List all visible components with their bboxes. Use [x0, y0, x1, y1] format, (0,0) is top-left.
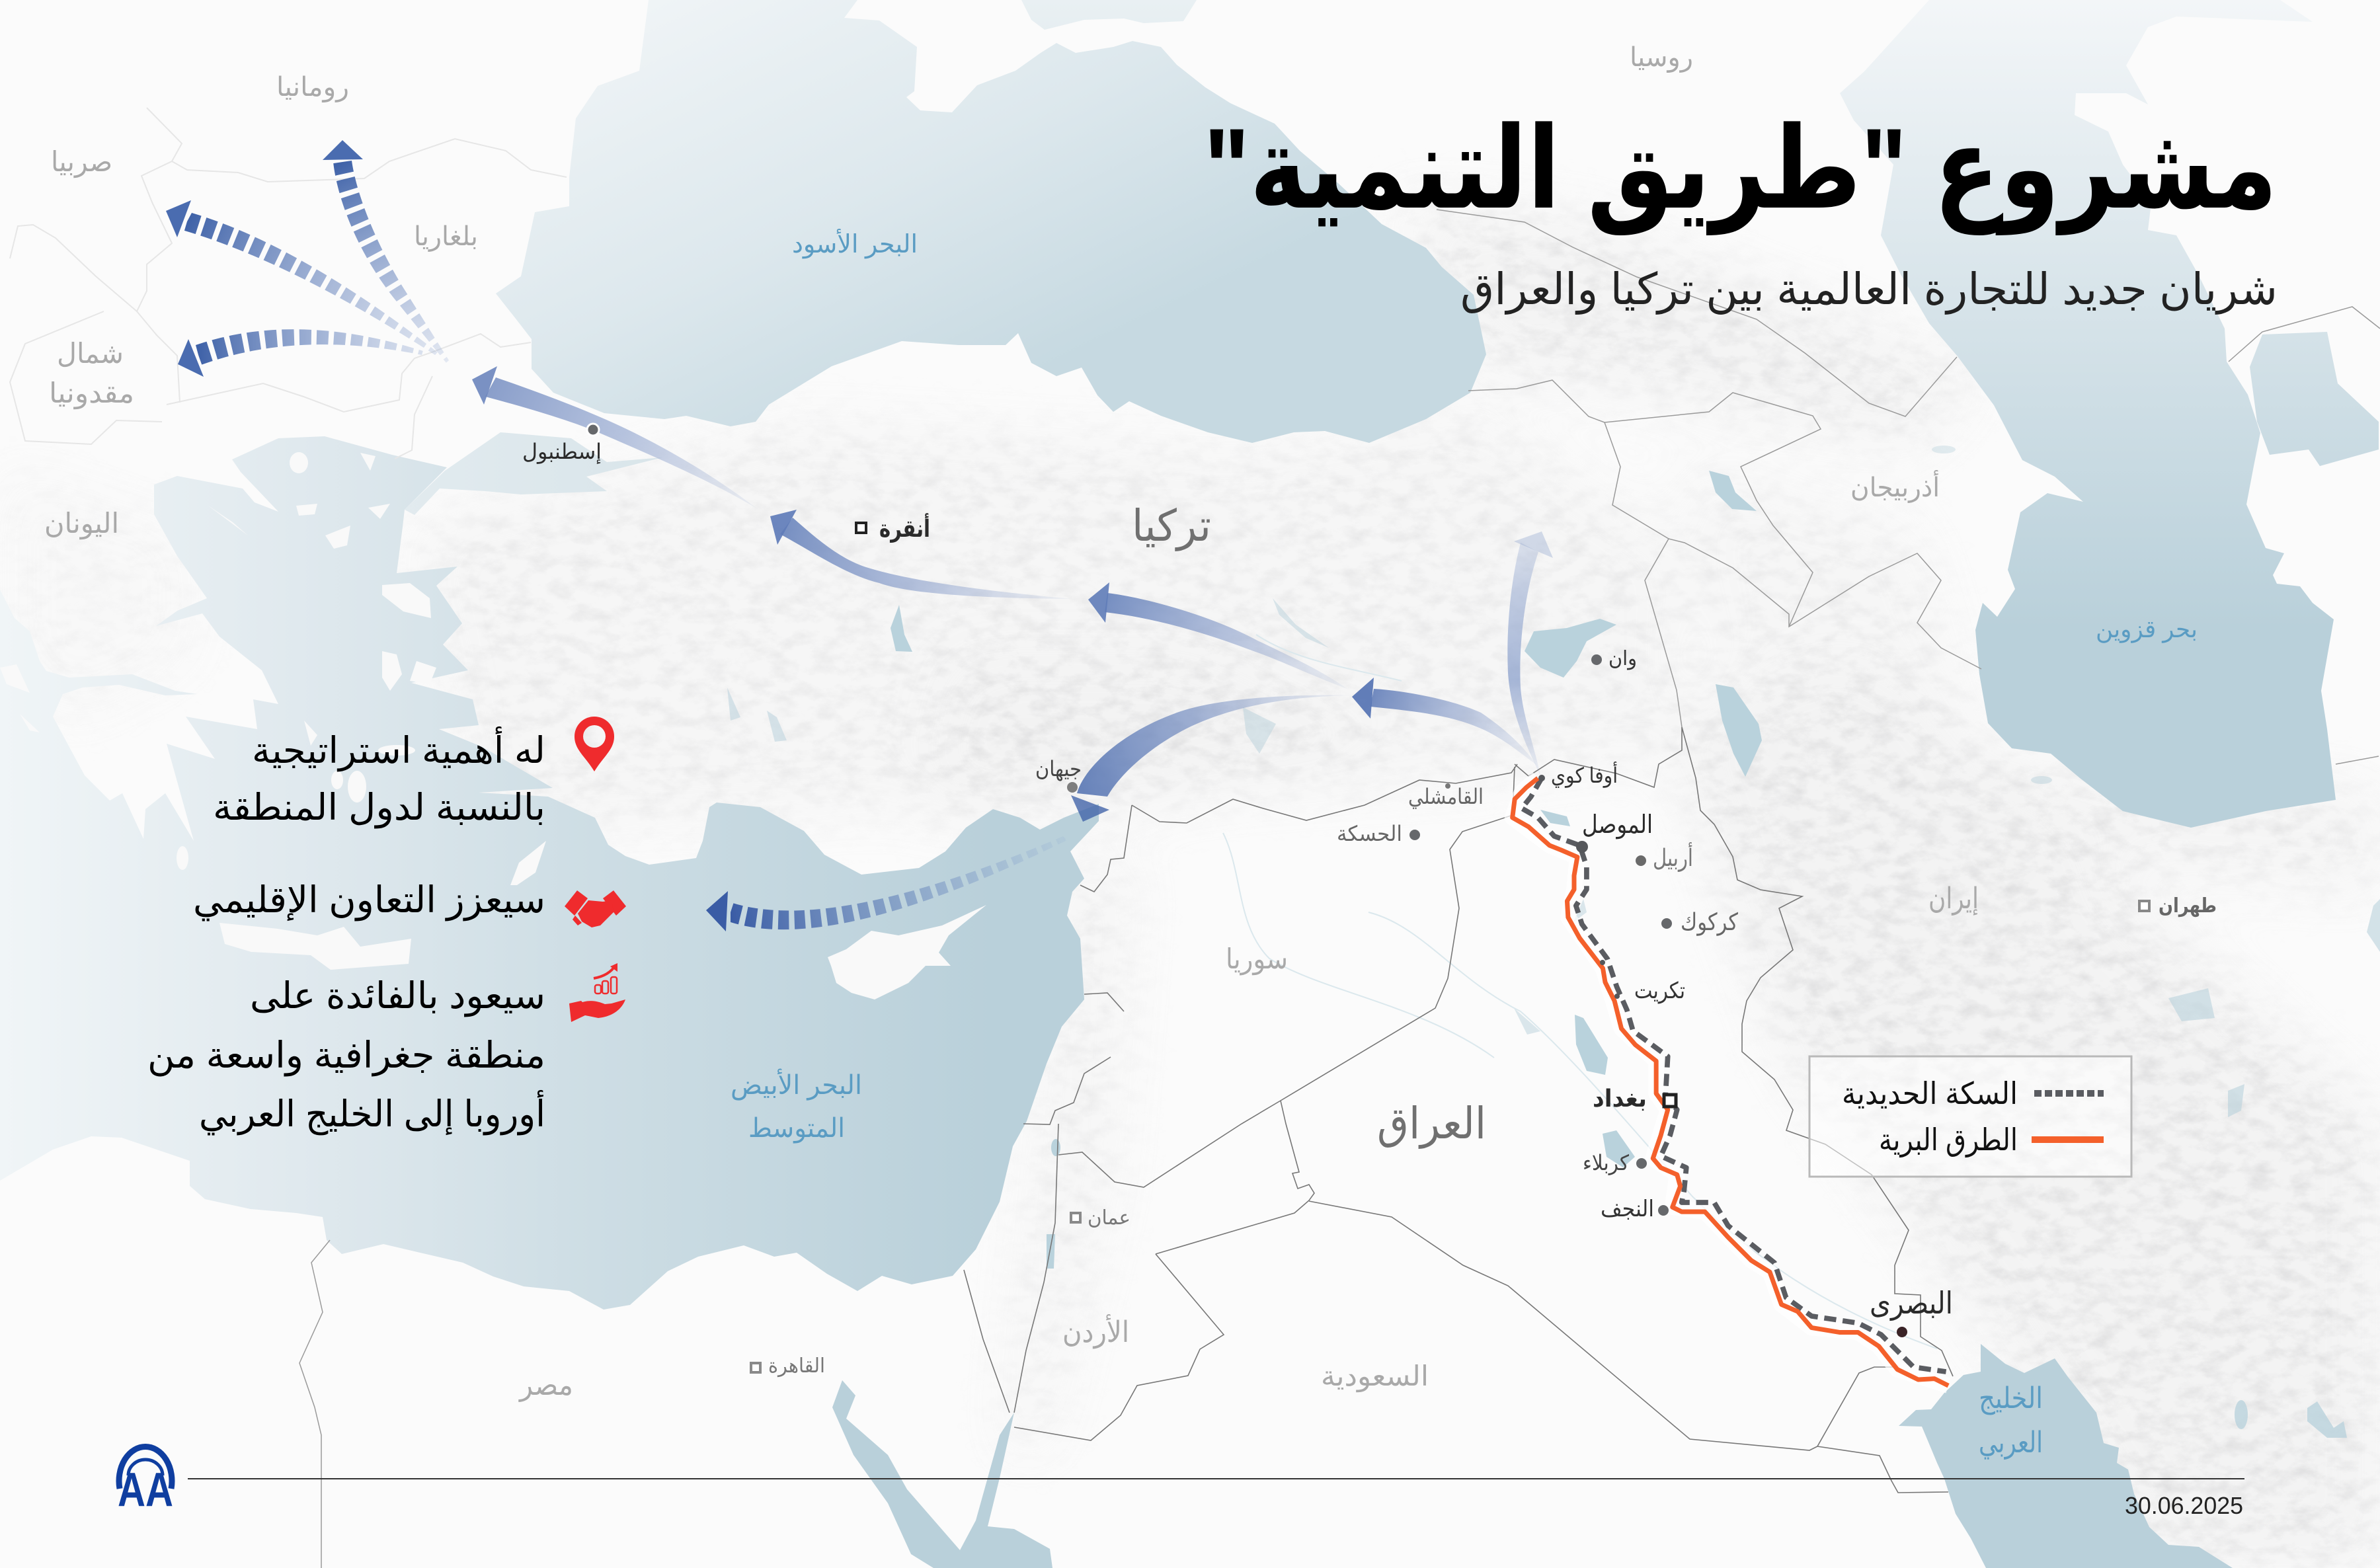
subtitle: شريان جديد للتجارة العالمية بين تركيا والعراق [1460, 264, 2278, 315]
arrow: dashed to Serbia [166, 200, 438, 355]
label: Cairo: القاهرة [768, 1355, 825, 1377]
arrow: solid to Ceyhan [1071, 695, 1352, 822]
label: Mediterranean line 2: المتوسط [748, 1114, 845, 1144]
icon: location pin [575, 717, 614, 771]
label: Gulf line 1: الخليج [1979, 1382, 2043, 1415]
label: Russia: روسيا [1630, 43, 1693, 73]
label: Erbil: أربيل [1653, 842, 1693, 872]
label: Kirkuk: كركوك [1681, 908, 1739, 936]
road line [1513, 778, 1948, 1386]
arrow: solid toward Ankara [770, 510, 1072, 599]
country borders [964, 727, 1953, 1493]
label: North: شمال [57, 338, 124, 369]
sea: Azov [1021, 0, 1197, 30]
label: Bulgaria: بلغاريا [414, 222, 478, 252]
rivers [1223, 635, 1937, 1349]
label: Ankara: أنقرة [879, 513, 930, 543]
text: point 3 line 3: أوروبا إلى الخليج العربي [199, 1090, 545, 1136]
date: 30.06.2025 [2125, 1492, 2243, 1519]
label: Serbia: صربيا [51, 146, 112, 178]
label: Ovakoy: أوفا كوي [1551, 762, 1618, 788]
text: point 2: سيعزز التعاون الإقليمي [193, 879, 545, 921]
label: Saudi Arabia: السعودية [1321, 1360, 1429, 1392]
text: point 3 line 1: سيعود بالفائدة على [250, 975, 545, 1017]
label: Macedonia: مقدونيا [49, 377, 134, 409]
text: point 3 line 2: منطقة جغرافية واسعة من [147, 1035, 545, 1077]
legend: road sample [2032, 1136, 2104, 1143]
label: Najaf: النجف [1601, 1196, 1654, 1222]
city labels [522, 440, 2217, 1377]
arrow: dashed to Romania [323, 140, 449, 363]
arrow: dashed to North Macedonia [178, 329, 423, 377]
label: Tikrit: تكريت [1634, 978, 1685, 1004]
label: Van: وان [1608, 648, 1637, 670]
logo: AA: AA [118, 1464, 173, 1516]
key points panel [147, 717, 626, 1136]
railway line [1522, 778, 1946, 1372]
terrain relief texture [464, 225, 2377, 1562]
arrow: solid north [1507, 531, 1553, 777]
label: Ceyhan: جيهان [1035, 757, 1082, 781]
arrow: solid toward Istanbul [472, 366, 758, 509]
label: Karbala: كربلاء [1583, 1151, 1630, 1175]
label: Tehran: طهران [2159, 895, 2217, 917]
label: Hasakah: الحسكة [1337, 822, 1402, 845]
label: Azerbaijan: أذربيجان [1850, 470, 1940, 503]
label: Greece: اليونان [44, 508, 119, 539]
sea: Marmara [405, 432, 662, 515]
label: Romania: رومانيا [276, 73, 349, 102]
sea: Arabian Gulf [1899, 1344, 2233, 1568]
sea: Kara-Bogaz [2250, 332, 2379, 466]
sea: Black Sea [496, 0, 1486, 443]
terrain tint [1002, 713, 2038, 883]
label: Baghdad: بغداد [1593, 1085, 1647, 1112]
footer rule [188, 1478, 2244, 1479]
label: Egypt: مصر [518, 1369, 573, 1402]
label: Syria: سوريا [1226, 943, 1288, 975]
label: Gulf line 2: العربي [1979, 1427, 2043, 1460]
legend: railway sample [2034, 1090, 2104, 1097]
arrow: solid from Ovakoy west [1352, 678, 1537, 765]
sea labels [731, 228, 2198, 1460]
label: Caspian Sea: بحر قزوين [2096, 615, 2198, 643]
legend [1809, 1056, 2131, 1177]
label: Istanbul: إسطنبول [522, 440, 602, 464]
text: point 1 line 2: بالنسبة لدول المنطقة [213, 787, 545, 829]
label: Mediterranean line 1: البحر الأبيض [731, 1068, 862, 1101]
routes: road and railway [1513, 778, 1948, 1386]
label: Iran: إيران [1928, 882, 1979, 916]
label: Qamishli: القامشلي [1408, 785, 1484, 809]
label: Mosul: الموصل [1582, 811, 1653, 840]
label: Jordan: الأردن [1062, 1313, 1129, 1349]
city markers [587, 424, 2149, 1372]
arrow: dashed across Mediterranean [706, 836, 1067, 931]
sea: Mediterranean and Aegean [0, 436, 1099, 1310]
text: point 1 line 1: له أهمية استراتيجية [252, 726, 545, 771]
icon: handshake [565, 890, 626, 927]
label: Basra: البصرى [1870, 1286, 1953, 1321]
label: Turkey: تركيا [1132, 501, 1211, 551]
lakes [727, 446, 2380, 1438]
logo: AA [118, 1446, 173, 1516]
label: Iraq: العراق [1377, 1099, 1486, 1149]
legend: railway label: السكة الحديدية [1842, 1076, 2018, 1111]
sea: Caspian [1840, 0, 2336, 828]
legend: road label: الطرق البرية [1879, 1122, 2018, 1158]
arrow: solid central Turkey [1088, 582, 1347, 689]
icon: hand with growth chart [569, 963, 625, 1022]
country labels [44, 43, 1979, 1402]
islands [0, 452, 986, 1000]
label: Black Sea: البحر الأسود [792, 228, 918, 259]
sea: Red Sea gulfs [832, 1380, 1052, 1568]
label: Amman: عمان [1088, 1207, 1130, 1229]
